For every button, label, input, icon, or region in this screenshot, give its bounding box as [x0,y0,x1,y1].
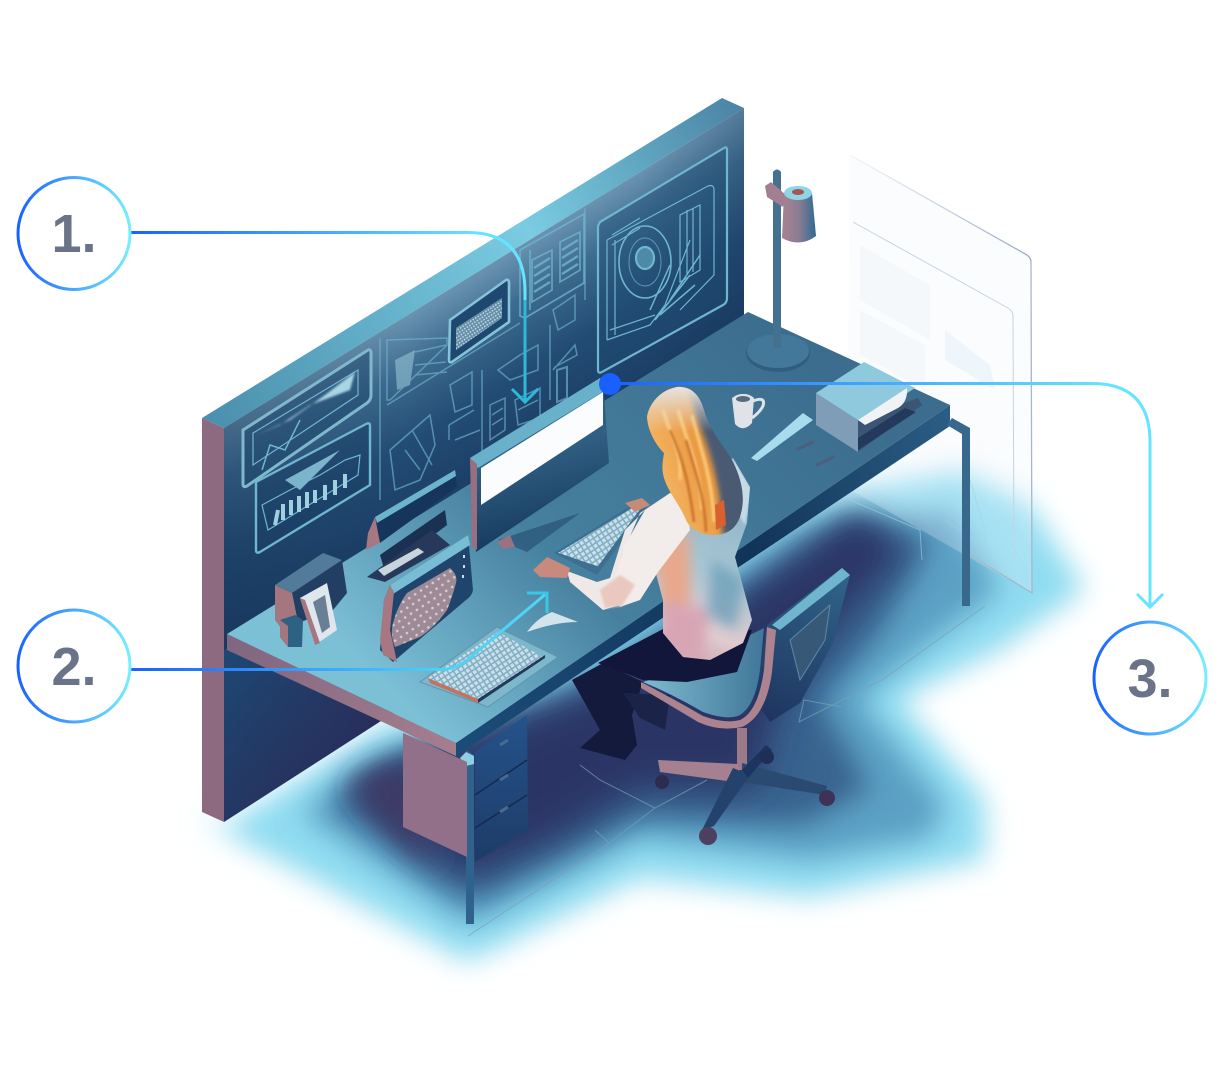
wall [202,98,744,822]
blueprint: upper left panel [243,350,371,487]
blueprint: sketch panel centre [380,208,585,500]
keyboard: front with mat [420,627,558,707]
desk leg right [947,418,970,606]
hair [647,387,743,535]
monitor top bar [470,378,609,468]
woman [533,380,752,682]
wall top face [202,98,744,428]
wall blueprints [243,147,727,553]
lamp clamp [765,182,786,207]
round-faced device [380,535,473,662]
device screen [392,568,456,647]
chair seat [643,628,764,717]
device top edge [390,535,470,594]
connector line 2 [131,593,547,670]
device left edge [380,585,397,662]
chair [641,568,850,729]
chair seat edge [641,627,776,729]
drawer pedestal [403,715,528,862]
chair back [755,568,850,722]
paper clips [798,442,833,465]
blueprint: large machine panel [598,147,727,373]
lamp pole [773,170,781,348]
ruler [751,413,813,461]
desk leg cap [460,752,474,766]
pedestal side [403,733,467,857]
torso [655,458,752,660]
document tray [816,362,922,452]
mouse [527,612,578,632]
ghost panel: translucent wall [847,155,1032,593]
keyboard: rear [554,502,647,575]
blueprint: lower left panel [256,423,370,553]
wall end face [202,418,224,822]
badge ring 1 [18,178,130,290]
connector line 3 [610,384,1150,606]
badge ring 3 [1094,622,1206,734]
coffee cup [732,394,764,428]
large monitor [470,378,609,552]
chair base [655,728,835,845]
anchor dot [599,373,621,395]
hand [533,557,570,578]
arm [567,493,670,610]
callout 1 [18,178,538,402]
badge ring 2 [18,610,130,722]
connector line 1 [131,232,525,402]
arrow head 3 [1137,594,1163,607]
trousers [598,627,752,682]
blueprint: speckled tile [449,280,509,362]
monitor screen [481,392,603,505]
callout 2 [18,593,547,722]
picture frame [300,583,337,645]
arrow head 2 [527,593,547,613]
lamp base [746,334,810,372]
desk front-left edge [227,634,456,756]
box [292,560,347,623]
monitor body [470,380,609,552]
arrow head 1 [512,389,538,402]
monitor left edge [470,458,477,550]
badge number 1: 1. [51,204,97,264]
floor tile lines [468,606,985,936]
monitor stand shadow [498,513,580,552]
badge number 2: 2. [51,637,97,697]
blueprint: text rows [520,214,584,318]
device body [380,535,473,662]
lamp shade [782,193,816,243]
lower legs [572,663,670,760]
desk leg left [466,750,474,924]
small monitor [366,470,457,582]
wall front face [224,108,744,650]
pedestal drawers [475,715,528,862]
desk clutter: speaker and frames [275,553,347,647]
floor glow [192,470,1085,962]
desk [227,312,970,924]
small cube [280,615,303,647]
desk top [227,312,950,743]
callout 3 [599,373,1206,734]
wall lower face [224,560,420,822]
badge number 3: 3. [1127,649,1173,709]
desk front-right edge [456,405,950,756]
lamp [746,170,816,372]
